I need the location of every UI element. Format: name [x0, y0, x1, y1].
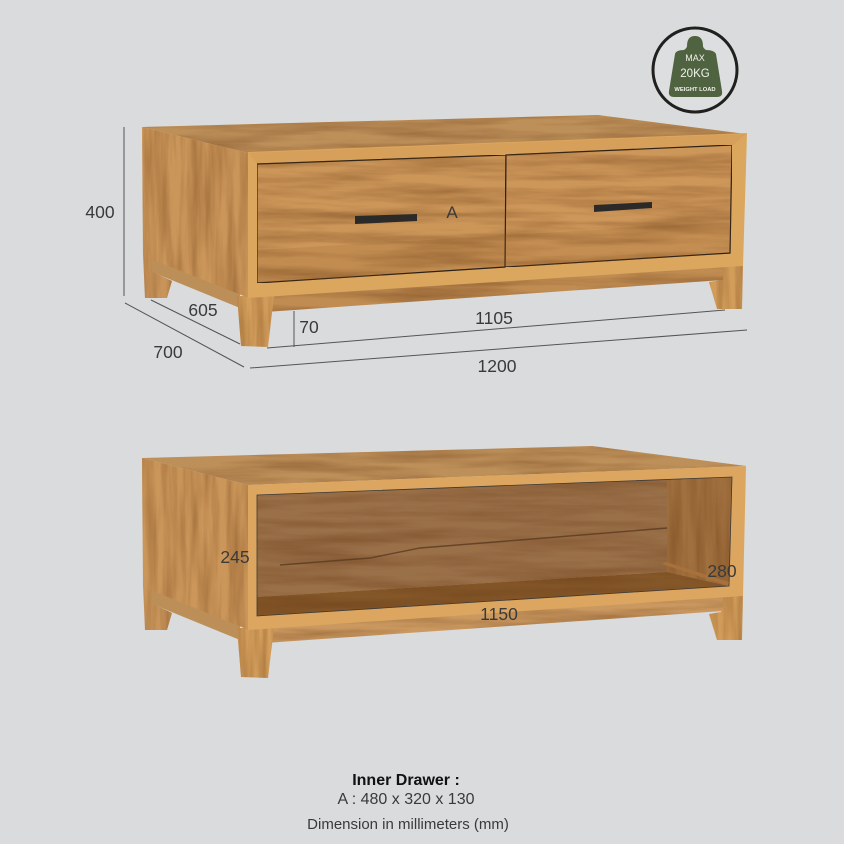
- front frame: [248, 133, 747, 298]
- icon: weight load badge: [653, 28, 737, 112]
- inner right wall: [667, 477, 732, 586]
- table top: [142, 115, 746, 153]
- dimension: depth 700: [125, 303, 244, 367]
- inner drawer note: Dimension in millimeters (mm): [307, 816, 509, 833]
- inner wall dimension bar: [662, 562, 729, 586]
- front frame: [248, 466, 746, 630]
- drawer label A: A: [446, 203, 458, 222]
- knot line: [280, 528, 667, 565]
- front apron: [265, 592, 723, 643]
- icon: weight load badge: MAX: [685, 53, 705, 63]
- handle: right: [594, 202, 652, 212]
- drawer lower shading: [258, 222, 729, 282]
- icon: weight load badge: 20KG: [680, 68, 710, 80]
- dimension: depth 605: [151, 300, 240, 344]
- dimension: leg height 70: 70: [299, 317, 319, 337]
- dimension: leg height 70: [294, 311, 319, 347]
- left side panel: [142, 127, 249, 298]
- left side panel: [142, 458, 249, 630]
- label 280: 280: [707, 561, 737, 581]
- icon: weight load badge: WEIGHT LOAD: [674, 87, 716, 93]
- back left leg: [143, 585, 172, 630]
- front apron: [265, 262, 723, 312]
- dimension: width 1200: [250, 330, 747, 376]
- inner drawer note: A : 480 x 320 x 130: [338, 791, 475, 808]
- right leg: [709, 264, 743, 309]
- inner shelf: [257, 572, 729, 616]
- side apron: [152, 586, 240, 640]
- opening edge: [257, 477, 732, 616]
- inner drawer note: [307, 772, 509, 833]
- side apron: [152, 255, 240, 308]
- frame top bevel: [249, 134, 746, 164]
- table top: [142, 446, 746, 485]
- dimension: depth 700: 700: [153, 342, 183, 362]
- dimension: width 1105: 1105: [475, 308, 513, 328]
- furniture: closed table with drawers: [142, 115, 747, 347]
- front left leg: [237, 628, 274, 678]
- dimension: height 400: 400: [85, 202, 115, 222]
- dimension: width 1105: [267, 308, 725, 348]
- label 1150: 1150: [480, 604, 518, 624]
- back left leg: [143, 254, 172, 298]
- right leg: [709, 594, 743, 640]
- dimension: width 1200: 1200: [478, 356, 517, 376]
- drawer panel: right: [505, 145, 732, 267]
- inner drawer note: Inner Drawer :: [352, 772, 460, 789]
- handle: left: [355, 214, 417, 224]
- label 245: 245: [220, 547, 250, 567]
- back wall: [257, 477, 732, 597]
- front left leg: [237, 296, 274, 347]
- furniture: open table carcass: [142, 446, 746, 678]
- dimension: depth 605: 605: [188, 300, 218, 320]
- drawer panel: left: [257, 155, 506, 283]
